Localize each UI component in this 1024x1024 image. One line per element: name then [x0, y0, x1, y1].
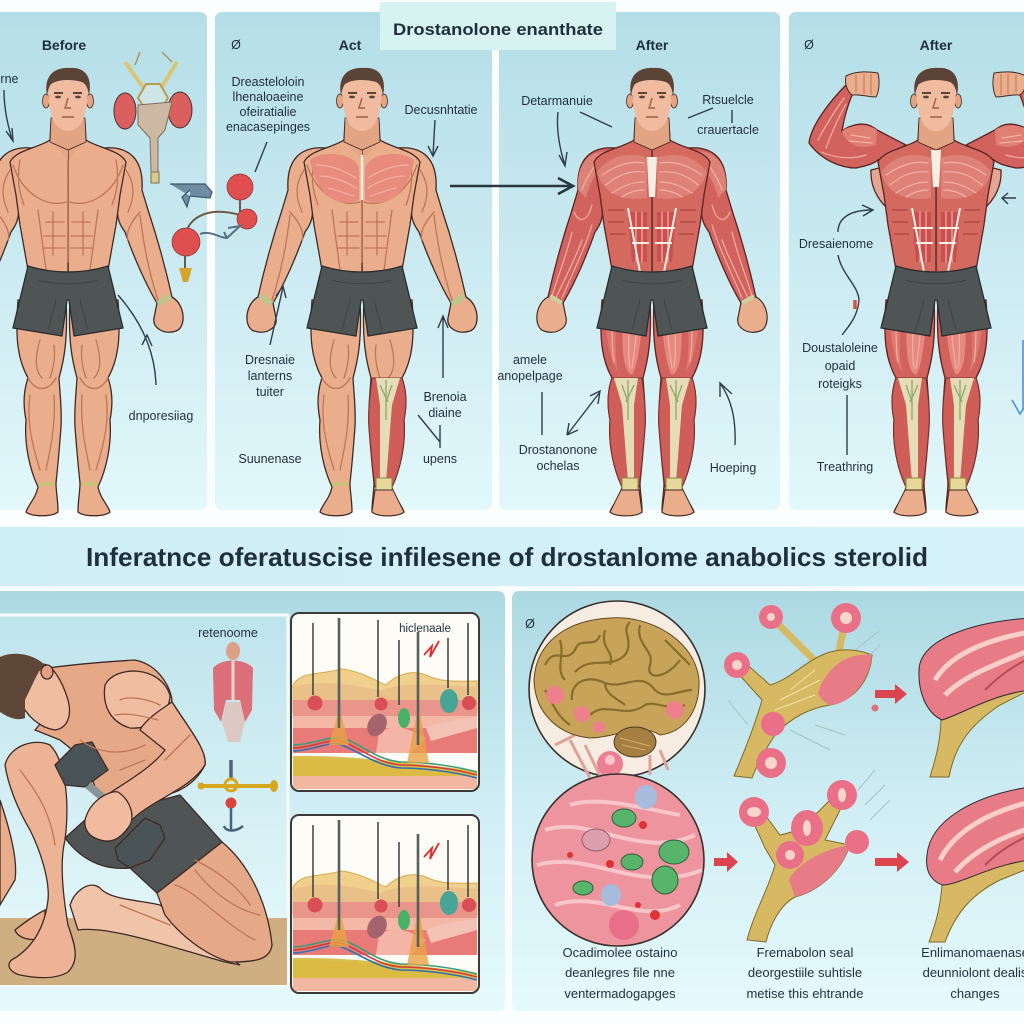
banner heading: [0, 527, 1024, 586]
panel: exercise: [0, 591, 505, 1011]
caption: right: changes: [950, 986, 1000, 1001]
panel: after: [497, 12, 780, 516]
panel number: Ø: [804, 38, 814, 52]
title box: Drostanolone enanthate: [393, 20, 603, 39]
caption: middle: deorgestiile suhtisle: [748, 965, 862, 980]
icon: small back muscle figure: [213, 642, 253, 742]
label: top right: Rtsuelcle: [702, 93, 754, 107]
icon: balance arrow: [198, 760, 278, 830]
marker: red dot: [872, 704, 878, 712]
arrows: callout lines: [838, 193, 1016, 455]
label: top left: lhenaloaeine: [233, 90, 303, 104]
heading: before: Before: [42, 37, 86, 53]
figure: muscle map body: [537, 68, 767, 516]
heading: act: Act: [339, 37, 362, 53]
panel: before: [0, 12, 207, 516]
arrow: red bottom left: [714, 852, 738, 872]
label: top left: ofeiratialie: [240, 105, 297, 119]
caption: left: Ocadimolee ostaino: [563, 945, 677, 960]
icon: muscle top: [919, 618, 1024, 777]
heading: after flexed: After: [920, 37, 953, 53]
caption: left: deanlegres file nne: [565, 965, 675, 980]
icon: neuron bottom: [739, 770, 890, 942]
icon: brain: [529, 601, 705, 778]
panel number: Ø: [231, 38, 241, 52]
label: lower right: upens: [423, 452, 457, 466]
icon: muscle bottom: [927, 787, 1024, 942]
arrow: red bottom middle: [875, 852, 909, 872]
label: small figure: retenoome: [198, 626, 258, 640]
arrows: callout lines: [255, 120, 448, 448]
label: lower left: ochelas: [536, 459, 580, 473]
label: middle left: roteigks: [818, 377, 862, 391]
label: middle left: Doustaloleine: [802, 341, 878, 355]
label: top left: enacasepinges: [226, 120, 310, 134]
scene backdrop: [0, 615, 288, 986]
label: middle left: opaid: [825, 359, 855, 373]
label: lower right: Hoeping: [710, 461, 756, 475]
label: middle left: Dresnaie: [245, 353, 295, 367]
icon: tissue circle: [532, 774, 704, 946]
banner heading: Inferatnce oferatuscise infilesene of drostanlome anabolics sterolid: [86, 542, 928, 572]
heading: after: After: [636, 37, 669, 53]
icon: molecule and transfer arrows: [170, 174, 257, 282]
panel: after flexed: [789, 12, 1024, 516]
caption: middle: Fremabolon seal: [757, 945, 854, 960]
panel number: Ø: [525, 617, 535, 631]
label: lower left: Drostanonone: [519, 443, 597, 457]
caption: left: ventermadogapges: [564, 986, 676, 1001]
label: middle left: amele: [513, 353, 547, 367]
label: lower left: Suunenase: [238, 452, 302, 466]
title box: [380, 2, 616, 50]
label: lower left: Treathring: [817, 460, 873, 474]
arrow: upper left: [4, 90, 13, 141]
floor: [0, 918, 287, 985]
caption: middle: metise this ehtrande: [746, 986, 864, 1001]
chart: skin section top: [291, 613, 479, 791]
label: skin section: hiclenaale: [399, 623, 451, 635]
label: middle left: lanterns: [248, 369, 292, 383]
figure: act body: [247, 68, 477, 516]
marker: red tick: [853, 300, 857, 309]
panel: mechanism: [512, 591, 1024, 1011]
figure: before body: [0, 68, 183, 516]
label: middle right: diaine: [428, 406, 462, 420]
figure: flexed muscle body: [809, 68, 1024, 516]
icon: adrenal organ diagram: [114, 52, 192, 183]
label: top left: Dreasteloloin: [232, 75, 305, 89]
panel: act: [215, 12, 492, 516]
chart: skin section bottom: [291, 815, 479, 993]
arrow: lower right: [118, 295, 156, 385]
label: top left: Detarmanuie: [521, 94, 593, 108]
arrows: callout lines: [542, 108, 735, 445]
label: lower right: dnporesiiag: [129, 409, 193, 423]
label: top right: crauertacle: [697, 123, 759, 137]
label: middle left: tuiter: [256, 385, 284, 399]
arrow: red top: [875, 684, 907, 704]
label: middle right: Brenoia: [423, 390, 467, 404]
figure: crouching man with dumbbell: [0, 654, 272, 978]
label: upper left: Dresaienome: [799, 237, 873, 251]
label: top right: Decusnhtatie: [405, 103, 478, 117]
arrow: panel 2 to 3: [450, 178, 573, 194]
label: middle left: anopelpage: [497, 369, 563, 383]
icon: neuron top: [724, 603, 880, 778]
arrow: blue right edge: [1012, 340, 1024, 414]
